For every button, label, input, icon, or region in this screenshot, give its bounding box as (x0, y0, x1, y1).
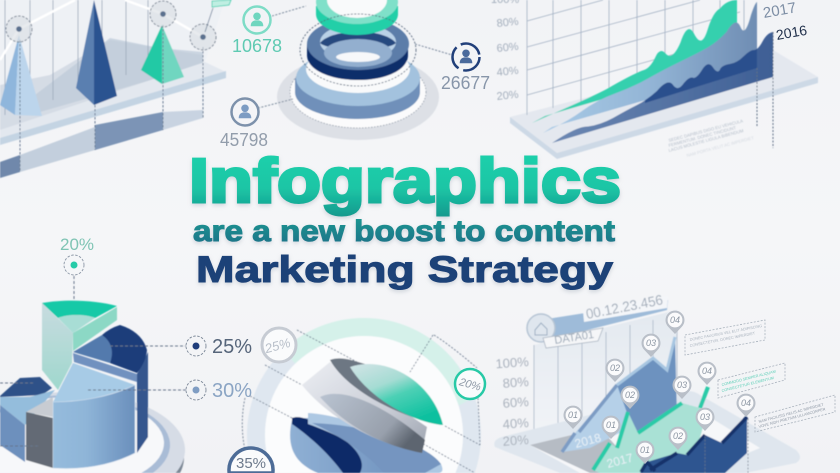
callouts (685, 320, 835, 432)
axis labels: 100% (495, 354, 530, 371)
label: 20%: 20% (60, 235, 94, 254)
chart trend line (0, 0, 203, 60)
sphere teal cap (350, 364, 443, 425)
wall area fill (0, 40, 203, 130)
panel: stacked rings (258, 0, 452, 140)
connector lines (258, 6, 452, 108)
stat: 10678: 10678 (232, 36, 282, 56)
pins: 02 (610, 363, 620, 373)
chart caption: SEDEC DAPIBUS DIGO EU VEHICULA (668, 118, 744, 143)
axis labels (491, 0, 519, 103)
data point markers (6, 1, 216, 50)
pie base disc (0, 392, 185, 473)
badge: 20% (455, 369, 485, 399)
callouts: CONSECTETUR. DONEC IMPERDIET (689, 331, 756, 348)
leader lines (705, 417, 748, 473)
dashed lines (757, 32, 773, 148)
pins: 04 (702, 366, 712, 376)
pins: 03 (700, 412, 710, 422)
axis labels: 20% (502, 432, 530, 449)
subtitle: are a new boost to content: are a new boost to content (193, 215, 615, 248)
axis labels: 20% (496, 89, 519, 103)
sphere dark crescent (330, 358, 443, 425)
axis labels: 80% (496, 16, 519, 30)
axis labels: 60% (496, 41, 519, 55)
grid (527, 0, 744, 115)
stat: 26677: 26677 (441, 73, 490, 93)
platform (0, 62, 226, 142)
label: 2016: 2016 (775, 22, 808, 43)
stat: 10678 (232, 6, 282, 56)
series: teal mountain (593, 387, 708, 473)
header value: 00.12.23.456 (585, 291, 664, 322)
chart caption: NAM PORTA VELIT AC IMPERDIET (686, 135, 755, 158)
lower information panels (0, 110, 203, 178)
axis labels: 40% (496, 65, 519, 79)
subtitle: Marketing Strategy: Marketing Strategy (196, 249, 614, 290)
panel: segmented sphere (242, 318, 481, 473)
callouts: DONEC FAUCIBUS VEL ELIT ADIPISCING (689, 324, 763, 342)
small note tag (205, 0, 231, 32)
axis labels: 80% (502, 374, 530, 391)
chart caption: FERMENTUM. DONEC TINCIDUNT (668, 125, 737, 148)
wall grid (534, 310, 677, 445)
pyramid: light blue (0, 35, 42, 116)
sphere light lower slice (308, 413, 442, 473)
axis labels (495, 354, 530, 449)
data tab: DATA01 (554, 329, 595, 347)
pins: 02 (673, 431, 683, 441)
area: overlap (644, 49, 757, 103)
slice: light blue (53, 363, 135, 468)
sphere grey slice (302, 362, 427, 453)
badge: 35%: 35% (236, 455, 266, 472)
badge: 20%: 20% (457, 376, 482, 394)
panel: area chart (491, 0, 818, 159)
outer ring segments (247, 318, 481, 473)
stat: 26677 (441, 44, 490, 93)
ring base disc (277, 54, 439, 140)
pins (564, 311, 756, 464)
data tab (543, 328, 603, 348)
axis labels: 40% (502, 415, 530, 432)
pie dashed leaders (0, 276, 186, 446)
pins: 02 (625, 390, 635, 400)
pins: 01 (568, 410, 578, 420)
area: mid blue series (543, 2, 757, 133)
label: 25% (186, 336, 252, 358)
label: 2017: 2017 (762, 0, 798, 22)
year labels: 2018 (573, 430, 603, 451)
callouts: VOVE NIDH PRETIUM ULLAMCORPER (758, 407, 826, 429)
ring: teal top (316, 0, 398, 35)
area: teal series (532, 0, 737, 123)
tablet (494, 391, 800, 473)
area: dark series (552, 32, 773, 143)
ring: navy middle (307, 18, 409, 80)
label: 30% (186, 380, 252, 402)
stat: 45798 (220, 98, 268, 150)
slice: grey (26, 397, 53, 468)
pyramid: navy (76, 0, 117, 105)
pins: 01 (606, 420, 616, 430)
stat: 45798: 45798 (220, 130, 268, 150)
label: 30%: 30% (212, 380, 252, 402)
pins: 03 (646, 338, 656, 348)
pyramid: teal (141, 25, 184, 84)
slice: left blue (0, 377, 55, 462)
pins: 04 (741, 398, 751, 408)
platform (510, 50, 818, 159)
panel: pyramid bar chart (0, 0, 231, 178)
chart caption: LACUS MOLESTIE LIGULA BIBENDUM (668, 128, 744, 153)
chart caption (668, 118, 755, 158)
title: Infographics: Infographics (189, 147, 621, 216)
pins: 04 (670, 315, 680, 325)
ring: bottom blue (295, 45, 420, 119)
series: blue mountain (562, 337, 677, 452)
pins: 03 (677, 380, 687, 390)
series: navy mountain (640, 417, 747, 473)
year labels (573, 430, 635, 471)
chart back wall (0, 0, 225, 130)
label: 20% (60, 235, 94, 275)
slice: navy (73, 325, 148, 453)
badge: 25%: 25% (262, 335, 292, 356)
dashed drop lines (20, 25, 203, 172)
slice: teal (42, 301, 117, 390)
callouts: CONSECTETUR ELEMENTUM (721, 376, 774, 393)
label: 25%: 25% (212, 336, 252, 358)
year labels: 2017 (605, 450, 635, 471)
header bar (527, 296, 668, 342)
panel: tablet mountain chart (494, 291, 800, 473)
ring dashed arc (242, 330, 480, 473)
pins: 01 (640, 445, 650, 455)
callouts: NAM FACILISIS HELIS AC IMPERDIET (758, 403, 825, 424)
sphere bottom blue section (290, 417, 430, 473)
axis labels: 60% (502, 394, 530, 411)
badge: 25% (262, 328, 296, 362)
panel: 3D pie chart (0, 276, 186, 473)
callouts: COMMODO SEMPER ALIQUAM (721, 370, 776, 387)
badge: 35% (229, 448, 273, 473)
rings dashed orbit (300, 14, 416, 86)
